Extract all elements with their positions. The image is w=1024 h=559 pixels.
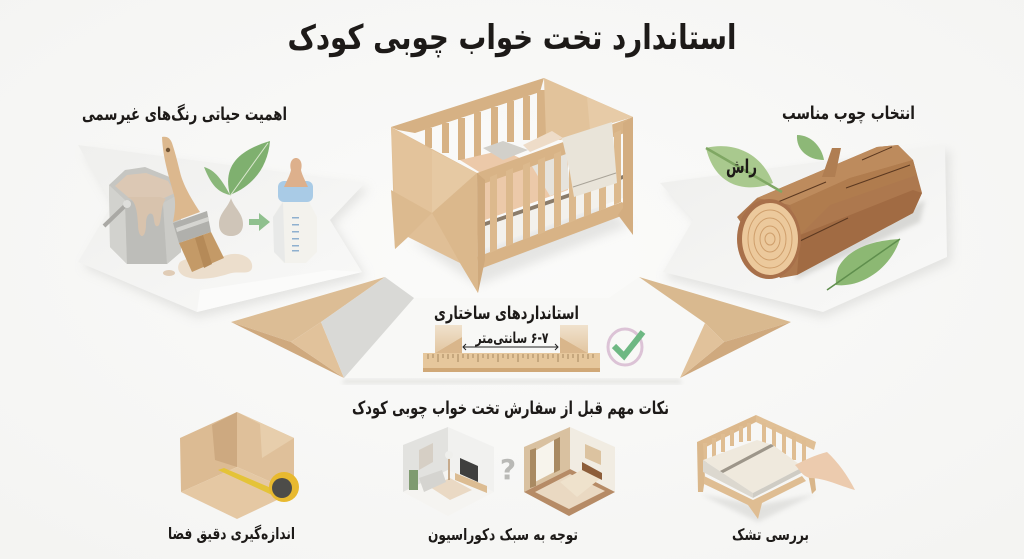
label: check mattress: بررسی تشک bbox=[732, 525, 809, 544]
heading: structural standards: استانداردهای ساختاری bbox=[434, 303, 579, 324]
icon: check mark bbox=[608, 329, 643, 365]
label: beech: راش bbox=[726, 156, 757, 178]
icon: bed with hand bbox=[697, 415, 855, 522]
icon: arrow bbox=[249, 213, 270, 231]
heading: suitable wood: انتخاب چوب مناسب bbox=[782, 103, 915, 124]
tip: measure space bbox=[168, 412, 299, 543]
icon: classic room bbox=[524, 427, 615, 516]
tip: decor style bbox=[403, 427, 615, 544]
towel bbox=[562, 122, 617, 197]
paint puddle bbox=[178, 254, 252, 279]
right end panel bbox=[544, 78, 633, 140]
illustration: wooden crib bbox=[391, 78, 633, 293]
label: measure space: اندازه‌گیری دقیق فضا bbox=[168, 524, 295, 543]
icon: beech leaf with label bbox=[706, 146, 782, 192]
label: decor style: توجه به سبک دکوراسیون bbox=[428, 525, 578, 544]
right kraft fold bbox=[639, 277, 791, 378]
left kraft fold bbox=[231, 277, 414, 378]
title: استاندارد تخت خواب چوبی کودک bbox=[288, 18, 736, 58]
icon: green leaves bbox=[204, 141, 270, 196]
heading: tips before ordering: نکات مهم قبل از سفارش تخت خواب چوبی کودک bbox=[352, 398, 669, 419]
mattress and bedding bbox=[460, 131, 623, 248]
icon: paint drop bbox=[219, 198, 243, 236]
icon: cardboard corner with tape measure bbox=[180, 412, 299, 519]
ruler with measured gap bbox=[423, 325, 600, 372]
left end panel bbox=[391, 127, 478, 293]
icon: modern room bbox=[403, 427, 494, 516]
panel: structural standards bbox=[231, 277, 791, 384]
icon: baby bottle bbox=[273, 158, 317, 263]
front rails and slats bbox=[477, 117, 633, 293]
icon: paint can bbox=[104, 167, 181, 264]
heading: non-toxic paint: اهمیت حیاتی رنگ‌های غیرسمی bbox=[82, 103, 287, 125]
icon: log bbox=[737, 145, 925, 280]
icon: question mark: ? bbox=[500, 453, 516, 486]
tip: check mattress bbox=[697, 415, 855, 544]
panel: non-toxic paint bbox=[78, 103, 369, 318]
measurement label: ۶-۷ سانتی‌متر bbox=[475, 329, 548, 347]
icon: brush bbox=[162, 137, 224, 272]
panel: suitable wood bbox=[660, 103, 951, 318]
icon: bottom leaf bbox=[827, 239, 900, 290]
back rail and slats bbox=[391, 78, 546, 160]
icon: small leaf bbox=[797, 135, 824, 160]
